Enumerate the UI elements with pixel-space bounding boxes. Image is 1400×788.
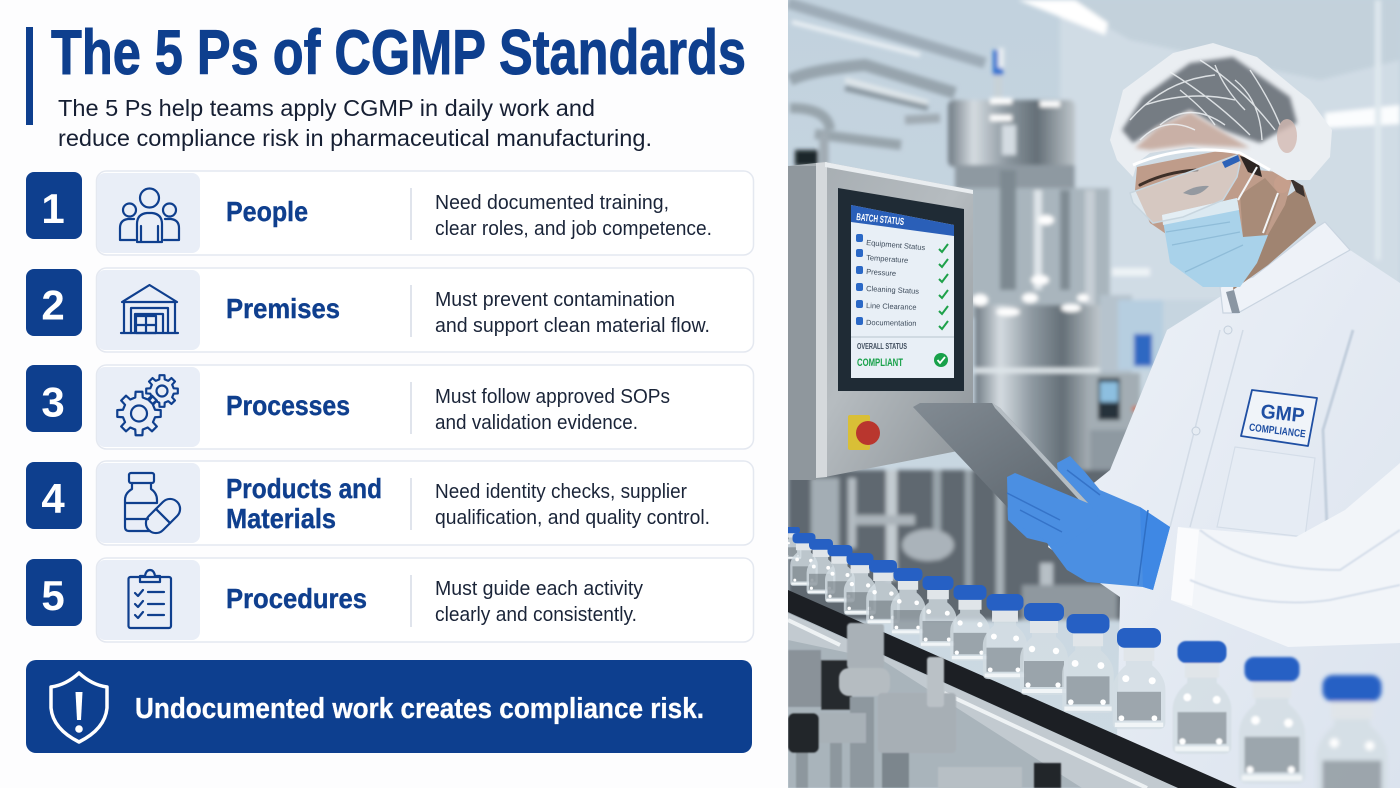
description 5 (435, 578, 643, 626)
touchscreen: batch status: Cleaning Status (866, 284, 919, 296)
row 2: Premises (26, 268, 754, 352)
name: Procedures: Procedures (226, 583, 367, 614)
head with hairnet, glasses and mask (1110, 43, 1332, 290)
callout text: Undocumented work creates compliance risk. (135, 693, 704, 725)
icon: warning shield (51, 673, 107, 742)
bracket blocks (839, 623, 1061, 788)
control panel (788, 162, 973, 480)
number badge 1 (26, 172, 82, 239)
touchscreen: batch status: Temperature (866, 253, 908, 265)
row 5: Procedures (26, 558, 754, 642)
description 5: clearly and consistently. (435, 604, 637, 626)
GMP compliance badge: COMPLIANCE (1248, 422, 1306, 440)
tablet (913, 403, 1089, 510)
number badge 3: 3 (41, 378, 65, 426)
callout banner (26, 660, 752, 753)
GMP compliance badge (1241, 390, 1317, 446)
number badge 4 (26, 462, 82, 529)
accent bar (26, 27, 33, 125)
description 2: and support clean material flow. (435, 315, 710, 337)
touchscreen: batch status (838, 188, 964, 391)
number badge 3 (26, 365, 82, 432)
touchscreen: batch status: Pressure (866, 267, 896, 278)
card 1 (96, 171, 754, 255)
number badge 2: 2 (41, 282, 65, 328)
description 1: Need documented training, (435, 192, 669, 214)
name: Processes: Processes (226, 390, 350, 421)
name: Products and Materials: Products and (226, 473, 382, 504)
production line with vials (785, 527, 1387, 788)
subtitle: The 5 Ps help teams apply CGMP in daily work and (58, 95, 595, 121)
name: Products and Materials (226, 473, 382, 534)
number badge 2 (26, 269, 82, 336)
emergency stop button (848, 415, 880, 450)
card 2 (96, 268, 754, 352)
number badge 1: 1 (41, 185, 65, 232)
description 1 (435, 192, 712, 240)
face mask (1162, 167, 1278, 287)
subtitle (58, 95, 652, 151)
sleeve (1171, 463, 1400, 647)
row 1: People (26, 171, 754, 255)
GMP compliance badge: GMP (1260, 401, 1306, 427)
safety glasses (1130, 155, 1240, 223)
card 4 (96, 461, 754, 545)
photo: pharmaceutical technician at production line (785, 0, 1400, 788)
description 4: qualification, and quality control. (435, 507, 710, 529)
description 2 (435, 289, 710, 337)
name: People: People (226, 196, 308, 227)
blue glove: fingers and cuff (1007, 470, 1170, 590)
number badge 4: 4 (41, 475, 65, 522)
description 1: clear roles, and job competence. (435, 218, 712, 240)
icon tile: people (97, 173, 200, 253)
number badge 5 (26, 559, 82, 626)
hairnet (1110, 43, 1332, 180)
card 5 (96, 558, 754, 642)
description 3 (435, 386, 670, 434)
touchscreen: batch status: Equipment Status (866, 238, 926, 252)
description 4: Need identity checks, supplier (435, 481, 687, 503)
pocket (1217, 447, 1315, 537)
conveyor rail (788, 613, 1178, 788)
icon tile: clipboard (97, 560, 200, 640)
description 4 (435, 481, 710, 529)
title: The 5 Ps of CGMP Standards (51, 18, 746, 88)
technician (913, 43, 1400, 788)
description 2: Must prevent contamination (435, 289, 675, 311)
card 3 (96, 365, 754, 449)
touchscreen: batch status: Documentation (866, 318, 917, 328)
touchscreen: batch status: COMPLIANT (857, 357, 903, 369)
blue glove: back of hand (1007, 456, 1170, 590)
icon tile: warehouse (97, 270, 200, 350)
row 3: Processes (26, 365, 754, 449)
lab coat (1048, 222, 1400, 788)
subtitle: reduce compliance risk in pharmaceutical manufacturing. (58, 125, 652, 151)
number badge 5: 5 (41, 572, 65, 619)
description 3: Must follow approved SOPs (435, 386, 670, 408)
touchscreen: batch status: OVERALL STATUS (857, 342, 907, 351)
machinery under conveyor (788, 612, 1178, 788)
title block (26, 18, 746, 151)
description 5: Must guide each activity (435, 578, 643, 600)
name: Products and Materials: Materials (226, 503, 336, 534)
icon tile: bottle and capsule (97, 463, 200, 543)
description 3: and validation evidence. (435, 412, 638, 434)
icon tile: gears (97, 367, 200, 447)
background equipment (788, 0, 1400, 620)
name: Premises: Premises (226, 293, 340, 324)
touchscreen: batch status: Line Clearance (866, 301, 917, 312)
row 4: Products and Materials (26, 461, 754, 545)
touchscreen: batch status: BATCH STATUS (856, 212, 905, 228)
conveyor belt (788, 590, 1237, 788)
